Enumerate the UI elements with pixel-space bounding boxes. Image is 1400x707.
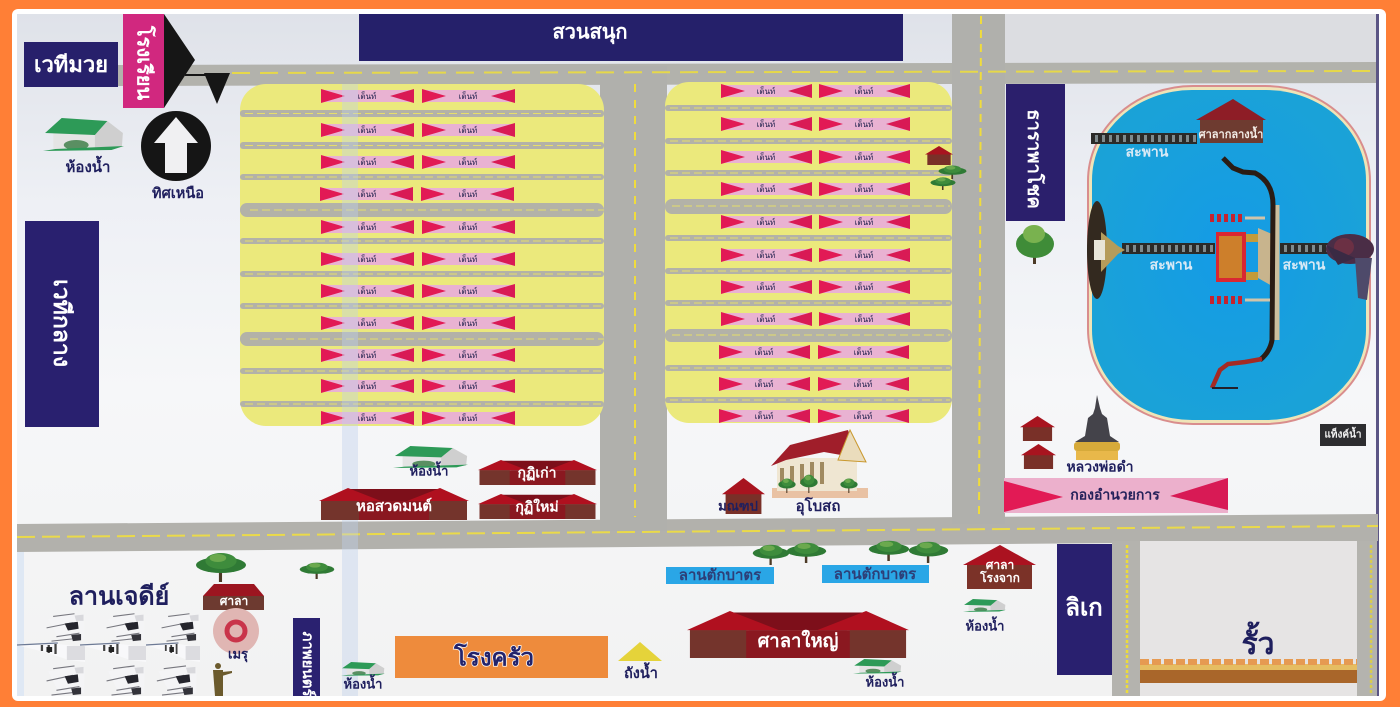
restroom under main hall: ห้องน้ำ (866, 671, 904, 689)
label: likay stage: ลิเก (1065, 594, 1103, 621)
panel: right tent field: เต็นท์ (757, 152, 775, 162)
label: school with arrow: โรงเรียน (133, 25, 157, 100)
banner: administration (1004, 478, 1228, 513)
label: amusement park: สวนสนุก (552, 21, 628, 44)
small huts by pond (1020, 416, 1056, 469)
panel: left tent field: เต็นท์ (459, 381, 477, 391)
banner: administration: กองอำนวยการ (1070, 487, 1160, 503)
label: amusement park (359, 14, 903, 61)
panel: right tent field: เต็นท์ (855, 217, 873, 227)
restroom right: ห้องน้ำ (966, 615, 1004, 633)
label: kitchen (395, 636, 608, 678)
panel: right tent field: เต็นท์ (855, 152, 873, 162)
fence strip (1140, 662, 1357, 683)
panel: left tent field (240, 84, 604, 426)
panel: right tent field: เต็นท์ (855, 314, 873, 324)
label: central stage (25, 221, 99, 427)
top right block (1005, 14, 1376, 63)
bridge labels: สะพาน (1126, 144, 1169, 160)
label: boxing stage: เวทีมวย (34, 52, 108, 77)
panel: right tent field: เต็นท์ (757, 282, 775, 292)
trees along lower road (196, 541, 948, 582)
giant statue (1087, 201, 1125, 299)
restroom lower left (341, 662, 385, 691)
panel: left tent field: เต็นท์ (358, 318, 376, 328)
label: thara pha chok (1006, 84, 1065, 221)
panel: right tent field: เต็นท์ (757, 86, 775, 96)
panel: left tent field: เต็นท์ (459, 350, 477, 360)
building: kitchen sala: ศาลา (986, 558, 1014, 572)
panel: right tent field (665, 82, 952, 423)
bridges (1091, 134, 1328, 253)
label: kitchen: โรงครัว (453, 642, 534, 671)
heading: chedi yard: ลานเจดีย์ (69, 582, 169, 611)
icon: north arrow: ทิศเหนือ (152, 185, 204, 202)
building: ordination hall (771, 430, 868, 516)
panel: right tent field: เต็นท์ (854, 347, 872, 357)
panel: right tent field: เต็นท์ (757, 119, 775, 129)
building: sala (203, 584, 264, 610)
panel: left tent field: เต็นท์ (358, 125, 376, 135)
restroom under main hall (853, 659, 904, 689)
panel: left tent field: เต็นท์ (358, 286, 376, 296)
label: alms yard right: ลานตักบาตร (834, 566, 917, 583)
icon: restroom top left (43, 118, 124, 176)
statue figure (213, 663, 232, 696)
panel: left tent field: เต็นท์ (358, 189, 376, 199)
label: cinema: ภาพยนตร์ (299, 631, 317, 697)
icon: restroom top left: ห้องน้ำ (66, 155, 110, 176)
building: old monk quarters: กุฏิเก่า (518, 465, 556, 482)
throne (1216, 232, 1246, 282)
panel: left tent field: เต็นท์ (459, 318, 477, 328)
panel: right tent field: เต็นท์ (855, 282, 873, 292)
bridge labels (1126, 144, 1326, 273)
panel: left tent field: เต็นท์ (358, 381, 376, 391)
building: ordination hall: อุโบสถ (796, 496, 840, 516)
panel: left tent field: เต็นท์ (459, 125, 477, 135)
icon: north arrow (141, 111, 211, 202)
restroom lower left: ห้องน้ำ (344, 673, 382, 691)
restroom above quarters (393, 446, 468, 478)
label: thara pha chok: ธาราพาโชค (1024, 109, 1046, 209)
restroom above quarters: ห้องน้ำ (410, 460, 448, 478)
building: sala: ศาลา (220, 594, 248, 608)
panel: left tent field: เต็นท์ (358, 222, 376, 232)
building: main hall: ศาลาใหญ่ (758, 629, 839, 652)
panel: right tent field: เต็นท์ (854, 379, 872, 389)
restroom right (963, 599, 1006, 633)
panel: left tent field: เต็นท์ (459, 254, 477, 264)
small hut with trees (925, 146, 966, 190)
building: old monk quarters (478, 460, 597, 485)
icon: crematorium: เมรุ (228, 646, 248, 662)
label: central stage: เวทีกลาง (49, 279, 75, 367)
panel: right tent field: เต็นท์ (755, 347, 773, 357)
panel: pond (1087, 86, 1374, 424)
building: kitchen sala (963, 545, 1036, 589)
panel: right tent field: เต็นท์ (755, 379, 773, 389)
label: boxing stage (24, 42, 118, 87)
panel: right tent field: เต็นท์ (757, 314, 775, 324)
building: chanting hall (319, 488, 469, 520)
faint fold band (342, 84, 358, 696)
panel: left tent field: เต็นท์ (459, 189, 477, 199)
building: chanting hall: หอสวดมนต์ (356, 497, 432, 515)
panel: left tent field: เต็นท์ (358, 157, 376, 167)
fence block (1140, 541, 1357, 696)
panel: right tent field: เต็นท์ (855, 86, 873, 96)
royal barge (1210, 158, 1277, 388)
building: kitchen sala: โรงจาก (979, 570, 1020, 585)
panel: left tent field: เต็นท์ (459, 222, 477, 232)
panel: right tent field: เต็นท์ (757, 250, 775, 260)
water pavilion (1196, 99, 1266, 143)
water pavilion: ศาลากลางน้ำ (1199, 126, 1263, 141)
building: new monk quarters: กุฏิใหม่ (515, 498, 559, 516)
icon: Buddha statue (1066, 395, 1134, 475)
icon: water tank: ถังน้ำ (624, 662, 658, 682)
bridge labels: สะพาน (1150, 257, 1193, 273)
icon: water tank (618, 642, 662, 682)
bridge labels: สะพาน (1283, 257, 1326, 273)
panel: right tent field: เต็นท์ (757, 184, 775, 194)
panel: right tent field: เต็นท์ (854, 411, 872, 421)
panel: left tent field: เต็นท์ (459, 286, 477, 296)
panel: left tent field: เต็นท์ (358, 91, 376, 101)
tree near pool (1016, 225, 1054, 264)
label: cinema (293, 618, 320, 697)
panel: left tent field: เต็นท์ (358, 254, 376, 264)
panel: left tent field: เต็นท์ (459, 413, 477, 423)
panel: left tent field: เต็นท์ (358, 350, 376, 360)
label: school with arrow (123, 14, 230, 108)
label: likay stage (1057, 544, 1112, 675)
label: alms yard left: ลานตักบาตร (679, 567, 762, 584)
panel: left tent field: เต็นท์ (459, 157, 477, 167)
panel: left tent field: เต็นท์ (459, 91, 477, 101)
label: water tank sign: แท็งค์น้ำ (1324, 427, 1362, 441)
icon: crematorium (213, 608, 259, 662)
building: mondop: มณฑป (718, 498, 758, 513)
building: mondop (718, 478, 765, 514)
building: main hall (687, 611, 909, 658)
chedi cluster (17, 614, 200, 695)
icon: Buddha statue: หลวงพ่อดำ (1066, 459, 1134, 475)
panel: right tent field: เต็นท์ (855, 119, 873, 129)
panel: left tent field: เต็นท์ (358, 413, 376, 423)
panel: right tent field: เต็นท์ (755, 411, 773, 421)
label: fence: รั้ว (1242, 621, 1274, 661)
label: water tank sign (1320, 424, 1366, 446)
panel: right tent field: เต็นท์ (757, 217, 775, 227)
panel: right tent field: เต็นท์ (855, 250, 873, 260)
building: new monk quarters (478, 494, 597, 519)
elephant statue (1326, 234, 1374, 300)
panel: right tent field: เต็นท์ (855, 184, 873, 194)
